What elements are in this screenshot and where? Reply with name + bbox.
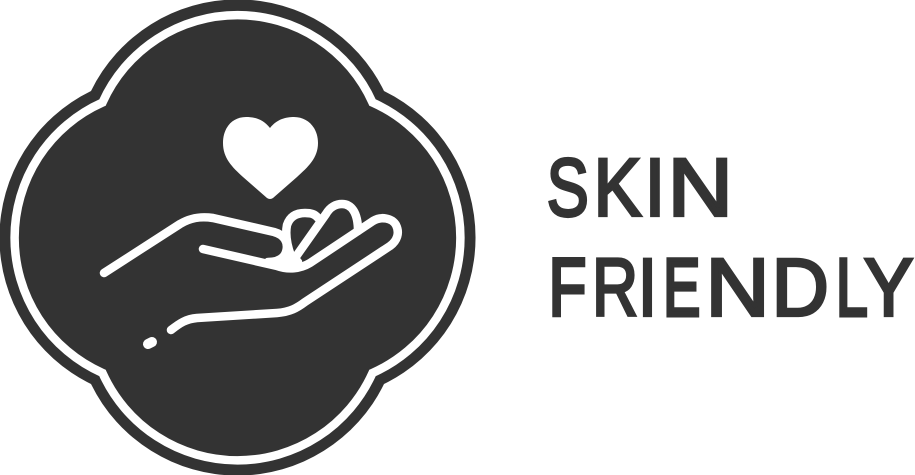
icon: heart [223,117,318,199]
hand: curled finger two [295,204,358,258]
heading: SKIN: S [547,142,589,233]
heading: FRIENDLY: L [836,242,868,333]
hand: upper arm and thumb [104,217,287,273]
hand: palm junction fill [280,256,298,266]
inner white outline ring [15,15,460,460]
heading: FRIENDLY: I [638,242,657,333]
heading: FRIENDLY: F [549,242,586,333]
hand: wrist dot [148,342,152,344]
heading: FRIENDLY: D [772,242,829,333]
heading: SKIN: I [645,142,665,233]
heading: SKIN: K [594,142,641,233]
badge: skin friendly emblem [0,0,476,475]
heading: FRIENDLY: N [706,242,770,333]
hand: palm and outer finger [171,218,398,330]
hand: curled finger one [286,213,318,256]
heading: FRIENDLY: E [663,242,700,333]
icon: open hand [104,204,398,344]
heading: SKIN: N [668,142,733,233]
quatrefoil badge background [0,0,476,475]
heading: FRIENDLY: R [592,242,638,333]
